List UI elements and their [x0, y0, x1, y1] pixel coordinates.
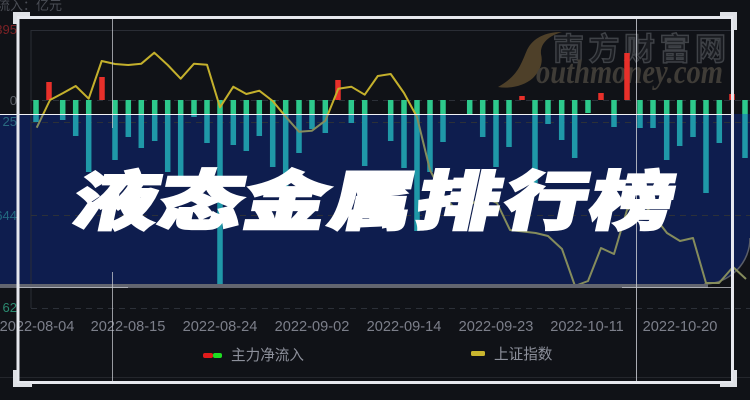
net inflow bars: inflow — [49, 53, 732, 100]
legend: net inflow — [203, 347, 304, 364]
x axis dates: 2022-09-02 — [275, 319, 349, 335]
y axis labels: 25 — [3, 114, 17, 129]
legend: index — [471, 346, 553, 363]
y axis labels: 62 — [3, 300, 17, 315]
net inflow bars: outflow — [36, 100, 745, 285]
legend: net inflow: 主力净流入 — [231, 347, 304, 364]
x axis dates: 2022-08-04 — [0, 319, 74, 335]
navy band — [0, 114, 750, 284]
y axis labels — [0, 22, 17, 315]
y axis labels: 0 — [10, 93, 17, 108]
x axis dates: 2022-10-11 — [550, 319, 624, 335]
baseline bar — [0, 284, 708, 288]
watermark: southmoney logo: 南方财富网 — [553, 32, 730, 67]
x axis dates: 2022-09-14 — [367, 319, 441, 335]
watermark: southmoney logo — [498, 32, 730, 91]
x axis dates: 2022-08-15 — [91, 319, 165, 335]
title: 液态金属排行榜 — [66, 150, 685, 243]
x axis dates: 2022-09-23 — [459, 319, 533, 335]
x axis dates: 2022-08-24 — [183, 319, 257, 335]
x axis dates — [0, 319, 717, 335]
index line — [37, 53, 746, 286]
legend: index: 上证指数 — [494, 346, 553, 363]
x axis dates: 2022-10-20 — [643, 319, 717, 335]
